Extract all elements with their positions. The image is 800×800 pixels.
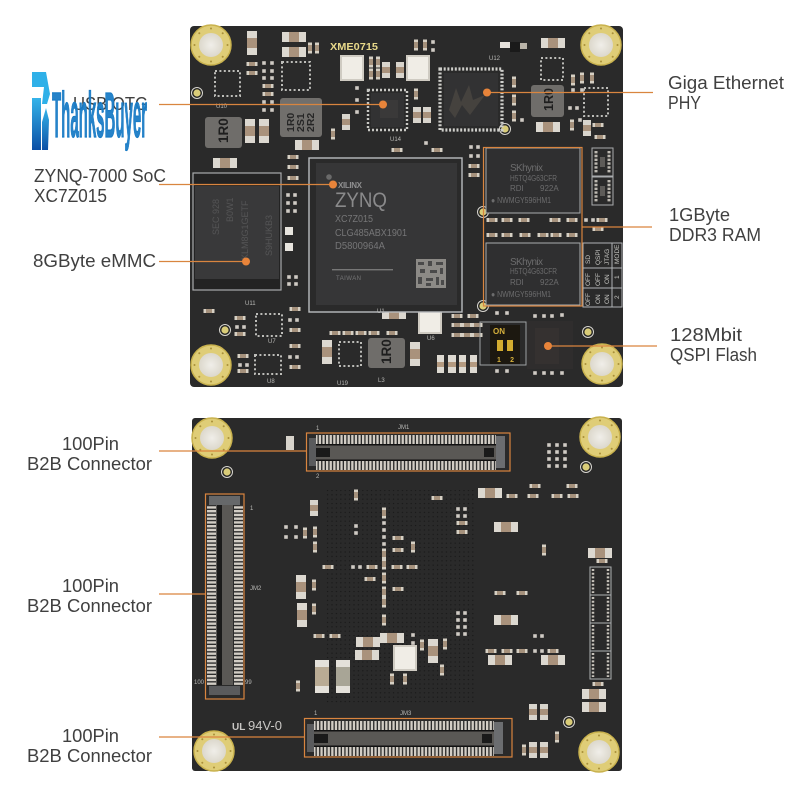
silkscreen mode table: OFF — [585, 273, 592, 286]
callout: JM2 leader — [159, 593, 205, 595]
DDR3 chip 2: SKhynix — [510, 257, 543, 268]
silkscreen mode table: ON — [604, 294, 611, 304]
Zynq chip outline and body — [309, 158, 462, 312]
logo: ThanksBuyer watermark — [32, 72, 147, 151]
DDR3 chip 1 — [486, 148, 580, 213]
QSPI flash chip — [527, 313, 573, 375]
DDR3 chip 2: ● NWMGY596HM1 — [491, 290, 551, 299]
label: 1GByte DDR3 RAM: 1GByte — [669, 205, 730, 225]
UL 94V-0 marking: 94V-0 — [248, 718, 282, 733]
callout: JM3 leader — [159, 736, 305, 738]
crystal oscillators — [340, 55, 442, 334]
inductor L2 2R2 — [280, 98, 322, 137]
four small capacitors near DIP switch — [437, 355, 477, 373]
panel: top side of board — [190, 25, 623, 387]
DDR3 chip 1: ● NWMGY596HM1 — [491, 196, 551, 205]
label: 1GByte DDR3 RAM — [669, 205, 761, 245]
test vias, bottom side — [222, 462, 592, 728]
connector JM1: JM1 — [398, 425, 410, 431]
label: 100Pin B2B Connector (JM2) — [27, 576, 152, 616]
silkscreen reference labels, top side: U10 — [216, 104, 228, 110]
mounting holes, top side — [191, 25, 622, 385]
silkscreen reference labels, top side: U7 — [268, 339, 276, 345]
label: 128Mbit QSPI Flash: QSPI Flash — [670, 345, 757, 365]
callout: DDR3 box and leader — [484, 148, 652, 306]
eMMC chip: S9HUKB3 — [264, 215, 274, 256]
silkscreen mode table — [583, 243, 622, 307]
Zynq chip marking text: TAIWAN — [336, 276, 361, 282]
DDR3 chip 2: 922A — [540, 278, 559, 287]
callout: Zynq leader — [159, 180, 337, 188]
silkscreen reference labels, top side: U11 — [245, 301, 256, 307]
connector JM2: 100 — [194, 680, 205, 686]
connector JM1: 2 — [316, 474, 320, 480]
small QFN chips — [215, 58, 608, 374]
label: 128Mbit QSPI Flash — [670, 325, 757, 365]
silkscreen reference labels, top side: U1 — [377, 309, 385, 315]
callout: eMMC leader — [159, 258, 250, 266]
connector JM2: 99 — [245, 680, 252, 686]
label: 100Pin B2B Connector (JM3): 100Pin — [62, 726, 119, 746]
small passives, top side — [204, 31, 608, 373]
silkscreen mode table: SD — [585, 255, 592, 264]
silkscreen mode table: ON — [604, 274, 611, 284]
Zynq chip marking text: XILINX — [338, 181, 363, 190]
connector JM1: 1 — [316, 426, 320, 432]
label: 100Pin B2B Connector (JM1) — [27, 434, 152, 474]
silkscreen mode table: 1 — [614, 275, 621, 279]
callout: JM1 leader — [159, 450, 307, 452]
connector JM3: 1 — [314, 711, 318, 717]
eMMC chip — [193, 173, 281, 290]
label: 100Pin B2B Connector (JM3) — [27, 726, 152, 766]
label: ZYNQ-7000 SoC XC7Z015: ZYNQ-7000 SoC — [34, 166, 166, 186]
callout: USB OTG leader — [159, 100, 387, 108]
DDR3 chip 2 — [486, 243, 580, 305]
silkscreen mode table: 2 — [614, 295, 621, 299]
silkscreen reference labels, top side: U19 — [337, 381, 349, 387]
inductor L3 1R0 — [368, 338, 405, 368]
inductor L2 2R2: 2R2 — [305, 113, 317, 132]
callout: Ethernet PHY leader — [483, 88, 653, 96]
label: 100Pin B2B Connector (JM1): B2B Connector — [27, 454, 152, 474]
connector JM2: JM2 — [250, 586, 262, 592]
connector JM3 — [304, 711, 512, 757]
silkscreen mode table: OFF — [585, 293, 592, 306]
label: 100Pin B2B Connector (JM3): B2B Connector — [27, 746, 152, 766]
silkscreen mode table: OFF — [595, 273, 602, 286]
connector JM3: JM3 — [400, 711, 412, 717]
inductor L4 1R0 — [531, 85, 564, 117]
silkscreen reference labels, top side: U14 — [390, 137, 402, 143]
test vias, top side — [192, 88, 594, 338]
data matrix code on Zynq chip — [416, 259, 446, 288]
label: Giga Ethernet PHY — [668, 73, 784, 113]
label: Giga Ethernet PHY: PHY — [668, 93, 701, 113]
DDR3 chip 1: RDI — [510, 184, 524, 193]
connector JM2 — [194, 494, 262, 699]
inductor L2 2R2: 2S1 — [295, 113, 307, 132]
eMMC chip: SEC 928 — [211, 199, 221, 235]
label: 8GByte eMMC: 8GByte eMMC — [33, 251, 156, 271]
DDR3 chip 1: H5TQ4G63CFR — [510, 174, 557, 183]
inductor L1 1R0: 1R0 — [216, 118, 231, 143]
UL 94V-0 marking: UL — [232, 722, 245, 733]
callout: QSPI flash leader — [544, 342, 657, 350]
eMMC chip: B0W1 — [225, 197, 235, 222]
inductor L1 1R0 — [205, 117, 242, 148]
passives, bottom side — [284, 436, 612, 758]
label: ZYNQ-7000 SoC XC7Z015: XC7Z015 — [34, 186, 107, 206]
inductor L4 1R0: 1R0 — [542, 88, 556, 111]
silkscreen reference labels, top side: U6 — [427, 336, 435, 342]
inductor L3 1R0: 1R0 — [379, 339, 394, 364]
Zynq chip marking text: ZYNQ — [335, 189, 387, 212]
label: USB OTG: USB OTG — [73, 94, 148, 114]
DDR3 chip 2: RDI — [510, 278, 524, 287]
silkscreen reference labels, top side: U12 — [489, 56, 501, 62]
Zynq chip marking text: XC7Z015 — [335, 214, 373, 225]
inductor L2 2R2: 1R0 — [285, 113, 297, 132]
Zynq chip marking text: D5800964A — [335, 241, 385, 252]
silkscreen code XME0715: XME0715 — [330, 41, 378, 53]
silkscreen mode table: JTAG — [604, 249, 611, 265]
label: 128Mbit QSPI Flash: 128Mbit — [670, 325, 742, 345]
label: Giga Ethernet PHY: Giga Ethernet — [668, 73, 784, 93]
silkscreen reference labels, top side — [216, 56, 501, 387]
panel: bottom side of board — [192, 417, 622, 772]
Zynq chip marking text — [326, 174, 407, 282]
mounting holes, bottom side — [192, 417, 620, 772]
USB PHY chip — [368, 90, 407, 130]
Ethernet PHY chip — [440, 69, 502, 130]
DIP switch: 1 2 — [497, 357, 514, 364]
resistor arrays upper right — [592, 148, 613, 205]
silkscreen mode table: MODE — [614, 244, 621, 264]
label: 1GByte DDR3 RAM: DDR3 RAM — [669, 225, 761, 245]
connector JM1 — [306, 425, 510, 480]
connector JM2: 1 — [250, 506, 254, 512]
large capacitors, bottom side — [315, 660, 350, 693]
DDR3 chip 1: SKhynix — [510, 163, 543, 174]
label: 100Pin B2B Connector (JM2): B2B Connector — [27, 596, 152, 616]
label: ZYNQ-7000 SoC XC7Z015 — [34, 166, 166, 206]
silkscreen mode table: ON — [595, 294, 602, 304]
resistor array block, right edge — [590, 567, 611, 679]
DIP switch: ON — [493, 327, 505, 336]
DDR3 chip 1: 922A — [540, 184, 559, 193]
DIP switch — [480, 322, 526, 365]
label: 100Pin B2B Connector (JM2): 100Pin — [62, 576, 119, 596]
Zynq chip marking text: CLG485ABX1901 — [335, 228, 407, 239]
via field on bottom side — [325, 490, 475, 705]
text: ThanksBuyer — [52, 79, 147, 151]
eMMC chip: KLM8G1GETF — [240, 200, 250, 260]
UL 94V-0 marking — [232, 718, 282, 733]
label: 100Pin B2B Connector (JM1): 100Pin — [62, 434, 119, 454]
DDR3 chip 2: H5TQ4G63CFR — [510, 267, 557, 276]
silkscreen reference labels, top side: U8 — [267, 379, 275, 385]
silkscreen mode table: QSPI — [595, 249, 602, 265]
silkscreen reference labels, top side: L3 — [378, 378, 385, 384]
